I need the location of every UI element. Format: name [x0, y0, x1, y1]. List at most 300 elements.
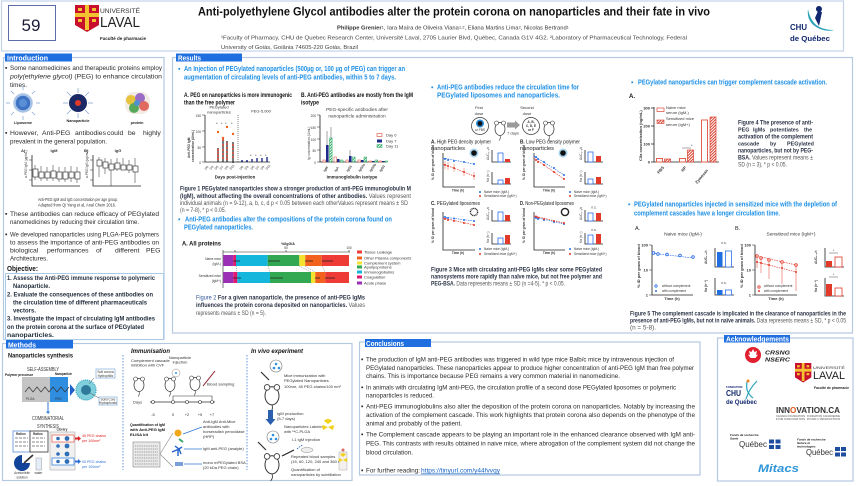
chart: protein corona stacked bars: 50: [284, 246, 288, 250]
text: efficacy reduction: nanomedicines by reducing their circulation time.: [10, 219, 139, 226]
panel: objectives list: on the protein corona at the surface of PEGylated: [7, 324, 144, 331]
diagram: dosing schedule: or F: [528, 128, 534, 132]
chart: figure 1A anti-PEG IgM scatter: D11: [265, 164, 272, 171]
diagram: in vivo experiment: Repeated blood samples: [291, 454, 335, 459]
chart: figure 1B immunoglobulin isotype bars: IgA: [334, 166, 340, 173]
chart: figure 3D non-PEGylated liposomes: n.s.: [591, 206, 597, 210]
heading: conclusions: [365, 339, 431, 348]
chart: protein corona stacked bars: Apolipoproteins: [364, 264, 392, 270]
diagram: in vivo experiment: (15, 60, 120, 240 and 360 min): [291, 459, 346, 464]
logo: FRQ Nature et technologies: Québec: [806, 448, 833, 457]
authors: 1,2: [459, 24, 465, 30]
chart: figure 1A anti-PEG IgM scatter: D3: [244, 165, 250, 171]
chart: figure 5A naive mice: n.s.: [721, 241, 727, 245]
text: anti-PEG prevalence: highly: [143, 130, 161, 137]
text: developed nanoparticles: Architectures.: [10, 256, 48, 262]
chart: figure 1A anti-PEG IgM scatter: *: [250, 153, 252, 158]
chart: figure 3B low PEG density: % ID per gram of blood: [522, 145, 526, 180]
chart: figure 4 C5a concentration bars: serum (IgM-): [666, 110, 690, 115]
logo: Université Laval: UNIVERSITÉ: [813, 365, 846, 370]
chart: protein corona stacked bars: Coagulation: [364, 274, 385, 280]
chart: figure 3B low PEG density: [520, 140, 607, 198]
panel: objectives list: vectors.: [13, 308, 36, 314]
chart: figure 1A anti-PEG IgM scatter: nanoparticles: [207, 110, 231, 114]
chart: figure 3B low PEG density: Naive mice (IgM-): [574, 190, 599, 194]
text: anti-PEG prevalence: ▪: [5, 130, 8, 137]
diagram: ELISA quantification: (HRP): [203, 434, 215, 439]
chart: figure 3B low PEG density: Time (h): [543, 188, 555, 192]
text: complement cascade: [361, 432, 695, 456]
chart: figure 5A naive mice: without complement: [662, 284, 690, 288]
chart: figure 3D non-PEGylated liposomes: Time (h): [543, 251, 555, 255]
diagram: combinatorial synthesis: 05 PEG chains: [82, 460, 106, 464]
finding: complement depletion: [628, 202, 838, 218]
caption: figure 3: Figure 3 Mice with circulating anti-PEG IgMs clear some PEGylated: [431, 266, 602, 274]
chart: figure 5B sensitized mice: [735, 226, 844, 301]
panel: methods: [2, 340, 352, 481]
chart: figure 5B sensitized mice: Kα (h⁻¹): [814, 280, 818, 292]
chart: figure 3C PEGylated liposomes: % ID per gram of blood: [431, 208, 435, 243]
arrow: to combinatorial synthesis: [46, 402, 50, 413]
logo: Fondation CHU de Québec: CHU: [726, 389, 741, 398]
chart: figure 3C PEGylated liposomes: AUC₀₋₆h: [486, 207, 490, 220]
chart: figure 3D non-PEGylated liposomes: Sensitized mice (IgM+): [574, 252, 607, 256]
chart: figure 1A anti-PEG IgM scatter: *: [265, 153, 267, 158]
chart: protein corona stacked bars: Sensitized mice: [199, 274, 221, 278]
chart: figure 4 C5a concentration bars: PBS: [656, 165, 665, 175]
chart: figure 1A anti-PEG IgM scatter: PEGylated: [209, 104, 229, 110]
caption: figure 4: the: [804, 128, 812, 134]
text: IgM production: ▪: [361, 356, 364, 364]
chart: protein corona stacked bars: Complement system: [364, 260, 401, 266]
text: developed nanoparticles: [5, 232, 160, 262]
chart: figure 1A anti-PEG IgM scatter: *: [231, 121, 233, 126]
text: further reading: https://tinyurl.com/y44fvvqy: [421, 468, 501, 474]
caption: figure 1: [180, 186, 411, 214]
chart: figure 3A high PEG density: A. High PEG density polymer: [431, 140, 491, 146]
caption: figure 4: Figure 4 The presence of anti-: [738, 120, 813, 126]
text: developed nanoparticles: performances: [47, 248, 89, 254]
title: Anti-polyethylene Glycol antibodies alter the protein corona on nanoparticles and their fate in vivo: [198, 4, 710, 18]
caption: figure 4: PEGylated: [787, 142, 814, 148]
affiliations: University of Goiás, Goiânia 74605-220 Goiás, Brazil: [221, 45, 358, 51]
logo: Innovation.ca: FOR INNOVATION: [776, 418, 805, 421]
panel: objectives list: 1. Assess the Anti-PEG immune response to polymeric: [7, 275, 155, 282]
diagram: combinatorial synthesis: water: [35, 471, 43, 475]
diagram: dosing schedule: dose: [475, 111, 484, 116]
chart: figure 1A anti-PEG IgM scatter: Anti-PEG IgM: [187, 137, 191, 158]
chart: figure 5A naive mice: with complement: [662, 289, 686, 293]
chart: figure 1A anti-PEG IgM scatter: 50: [197, 146, 201, 150]
text: developed nanoparticles: to assess the importance of anti-PEG antibodies on: [10, 240, 159, 246]
diagram: ELISA quantification: IgM anti-PEG (analyte): [203, 446, 244, 451]
chart: figure 1B immunoglobulin isotype bars: Day 0: [386, 132, 397, 138]
chart: figure 1A anti-PEG IgM scatter: concentration (U/mL): [191, 130, 195, 162]
affiliations: [221, 36, 687, 51]
diagram: self-assembly: PLGA: [26, 397, 35, 401]
diagram: combinatorial synthesis: Acetonitrile: [14, 471, 30, 475]
authors: 2: [519, 24, 522, 30]
diagram: ELISA quantification: Anti-IgM Anti-Mice: [203, 419, 236, 424]
finding: circulation time: [431, 84, 579, 100]
diagram: immunisation timeline: Days: [133, 400, 142, 404]
panel: objectives list: the circulation time of different pharmaceuticals: [13, 300, 147, 306]
diagram: self-assembly: Solid Core: [101, 398, 116, 402]
diagram: ELISA quantification: ELISA kit: [130, 432, 149, 437]
chart: protein corona stacked bars: %/IgG/A: [281, 242, 295, 246]
logo: CRSNG NSERC: [745, 347, 791, 364]
chart: figure 1A anti-PEG IgM scatter: *: [260, 153, 262, 158]
heading: methods: Methods: [8, 340, 36, 350]
text: efficacy reduction: These antibodies can reduce efficacy of PEGylated: [10, 211, 159, 218]
heading: introduction: [5, 54, 72, 62]
finding: protein corona: [178, 216, 392, 232]
diagram: combinatorial synthesis: solution: [16, 476, 28, 480]
caption: figure 5: (n = 5-8).: [630, 324, 656, 332]
panel: acknowledgements: [718, 334, 853, 481]
chart: IgM and IgG box plots: A): [21, 148, 26, 153]
chart: figure 4 C5a concentration bars: 200: [643, 124, 651, 128]
text: complement cascade: PEG. This contrasts with results obtained in naive mice, where abrogation of the complement system did not change the: [366, 440, 695, 448]
text: PEG usage: ▪: [5, 65, 8, 72]
diagram: in vivo experiment: Nanoparticles Labeled: [284, 424, 324, 429]
text: developed nanoparticles: of: [96, 248, 102, 254]
chart: figure 5A naive mice: % ID per gram of blood: [636, 244, 641, 288]
icon: protein: protein: [131, 121, 144, 125]
chart: figure 4 C5a concentration bars: *: [691, 143, 693, 148]
logo: Université Laval: [795, 363, 849, 390]
logo: FRQ Santé: [730, 433, 780, 449]
diagram: combinatorial synthesis: per 100nm²: [82, 465, 101, 469]
text: complement cascade: The Complement cascade appears to be playing an important role in the enhanced clearance observed with IgM anti-: [366, 432, 695, 438]
chart: figure 5A naive mice: 100: [641, 242, 649, 248]
chart: figure 1A anti-PEG IgM scatter: *: [255, 153, 257, 158]
logo: Innovation.ca: FONDATION CANADIENNE: [807, 415, 840, 418]
diagram: combinatorial synthesis: Ratios: [16, 432, 26, 436]
chart: figure 3D non-PEGylated liposomes: AUC₀₋₆h: [579, 207, 583, 220]
caption: figure 2: represents means ± SD (n = 5).: [196, 310, 266, 317]
chart: figure 1A anti-PEG IgM scatter: D5: [214, 165, 220, 171]
chart: protein corona stacked bars: 100: [346, 246, 352, 250]
chart: figure 1B immunoglobulin isotype bars: 150: [311, 126, 316, 130]
chart: IgM and IgG box plots: a-PEG IgM (µg/mL): [24, 150, 28, 178]
diagram: ELISA quantification: antibodies with: [203, 424, 229, 429]
subheading: immunisation: Immunisation: [131, 349, 170, 355]
diagram: self-assembly: SELF-ASSEMBLY: [27, 367, 60, 373]
text: PEG usage: [5, 65, 163, 89]
chart: IgM and IgG box plots: IgM: [51, 148, 58, 153]
chart: figure 3D non-PEGylated liposomes: Kα (h⁻¹): [579, 232, 583, 243]
diagram: in vivo experiment: (5-7 days): [277, 416, 296, 421]
diagram: ELISA quantification: mono mPEGylated BSA: [203, 460, 246, 465]
chart: figure 3B low PEG density: B. Low PEG density polymer: [520, 140, 580, 146]
caption: box plots: Adapted from Qi Yang et al, Anal Chem 2016.: [38, 202, 116, 208]
chart: figure 3D non-PEGylated liposomes: n.s.: [591, 228, 597, 232]
logo: FRQ Santé: Québec: [739, 440, 767, 449]
diagram: in vivo experiment: Quantification of: [291, 467, 321, 472]
finding: protein corona: PEGylated nanoparticles.: [184, 224, 253, 232]
caption: figure 1: individual animals (n = 9-12), a, b, c, d p < 0.05 between each otherValues represent means ± SD: [180, 200, 408, 207]
panel: conclusions: [360, 339, 700, 475]
caption: figure 4: IgMs: [753, 128, 765, 134]
chart: figure 3A high PEG density: % ID per gram of blood: [431, 145, 435, 180]
icon: liposome: Liposome: [14, 121, 32, 125]
caption: figure 5: presence of anti-PEG IgMs, but not in naïve animals. Data represents means ± SD, * p < 0.05: [630, 318, 846, 324]
diagram: combinatorial synthesis: 45 PEG chains: [82, 434, 106, 438]
chart: figure 1B immunoglobulin isotype bars: Day 11: [386, 144, 399, 148]
caption: figure 1: (n = 7-8), * p < 0.05.: [180, 207, 226, 214]
logo: FRQ Nature et technologies: technologies: [797, 444, 816, 448]
chart: protein corona stacked bars: Acute phase: [364, 280, 387, 286]
panel: header: [2, 1, 844, 51]
chart: figure 3B low PEG density: Kα (h⁻¹): [579, 170, 583, 182]
diagram: immunisation timeline: +5: [198, 412, 203, 417]
text: protein corona deposition: animal and probably of the patient.: [366, 420, 462, 428]
text: efficacy reduction: ▪: [5, 211, 8, 218]
chart: figure 3D non-PEGylated liposomes: Naive mice (IgM-): [574, 247, 599, 251]
diagram: immunisation timeline: +2: [185, 412, 190, 417]
diagram: immunisation timeline: [131, 355, 234, 417]
finding: protein corona: Anti-PEG antibodies alter the compositions of the protein corona found on: [185, 216, 392, 224]
chart: figure 5A naive mice: n.s.: [721, 281, 727, 285]
chart: figure 1B immunoglobulin isotype bars: 50: [312, 149, 316, 153]
chart: figure 5A naive mice: Naive mice (IgM-): [664, 232, 702, 238]
chart: figure 3C PEGylated liposomes: C. PEGylated liposomes: [431, 201, 480, 207]
heading: methods: [6, 340, 73, 350]
caption: figure 4: BSA. Values represent means ±: [738, 154, 814, 162]
chart: protein corona stacked bars: Naive mice: [205, 257, 221, 261]
chart: figure 5A naive mice: [635, 226, 734, 301]
text: further reading: [361, 468, 501, 474]
heading: introduction: Introduction: [7, 54, 48, 62]
diagram: dosing schedule: First: [475, 105, 484, 110]
chart: figure 1A anti-PEG IgM scatter: PEG-5,000: [251, 108, 272, 114]
text: IgM production: [361, 356, 695, 380]
text: developed nanoparticles: PEG: [146, 248, 160, 254]
chart: figure 1B immunoglobulin isotype bars: IgG2b: [369, 163, 377, 173]
logo: FRQ Nature et technologies: Fonds de recherche: [797, 438, 826, 442]
chart heading: figure 1A: A. PEG on nanoparticles is more immunogenic: [184, 93, 293, 99]
logo: Université Laval: [75, 5, 147, 41]
chart: figure 1B immunoglobulin isotype bars: IgG3: [379, 164, 386, 173]
diagram: dosing schedule: A, B,: [527, 120, 535, 124]
diagram: immunisation timeline: Nanoparticle: [169, 355, 192, 360]
diagram: combinatorial synthesis: [13, 416, 106, 480]
logo: Innovation.ca: POUR L'INNOVATION: [807, 418, 840, 421]
diagram: self-assembly: [5, 367, 117, 405]
poster number box: 59: [22, 16, 40, 35]
diagram: dosing schedule: or PBS: [475, 128, 485, 132]
chart: figure 3A high PEG density: Time (h): [452, 188, 464, 192]
chart: figure 5B sensitized mice: with complement: [764, 289, 788, 293]
chart: figure 5A naive mice: 1: [646, 292, 649, 298]
chart: figure 5A naive mice: AUC₀₋₆h: [704, 251, 708, 264]
text: efficacy reduction: [5, 211, 159, 226]
chart: figure 3D non-PEGylated liposomes: [520, 201, 607, 256]
icon: nanoparticle: Nanoparticle: [66, 119, 90, 123]
chart: figure 3B low PEG density: AUC₀₋₆h: [579, 147, 583, 160]
heading: conclusions: Conclusions: [366, 339, 404, 348]
chart: figure 5B sensitized mice: Time (h): [768, 296, 784, 301]
panel: objectives list: [6, 274, 164, 340]
chart: figure 1A anti-PEG IgM scatter: 0: [199, 161, 201, 165]
text: circulation profile: In animals with circulating IgM anti-PEG, the circulation profile of a second dose PEGylated liposomes or polymeric: [366, 384, 677, 392]
diagram: immunisation timeline: Blood sampling: [207, 382, 234, 386]
text: circulation profile: [361, 384, 677, 400]
panel: objectives list: 2. Evaluate the consequences of these antibodies on: [7, 292, 153, 298]
diagram: self-assembly: Nanoparticle: [55, 372, 72, 376]
diagram: in vivo experiment: Mice immunization with: [284, 373, 325, 378]
chart heading: figure 1B: B. Anti-PEG antibodies are mostly from the IgM: [301, 93, 413, 99]
diagram: immunisation timeline: 0: [172, 412, 175, 417]
chart: figure 5B sensitized mice: without complement: [764, 284, 792, 288]
authors: , Eliana Martins Lima: [465, 26, 519, 32]
diagram: immunisation timeline: injection: [173, 360, 187, 364]
logo: Fondation CHU de Québec: FONDATION: [726, 385, 742, 389]
text: protein corona deposition: [361, 404, 695, 428]
text: anti-PEG prevalence: However,: [10, 130, 38, 137]
logo: CRSNG NSERC: NSERC: [765, 358, 791, 364]
chart: figure 1B immunoglobulin isotype bars: 0: [314, 161, 316, 165]
caption: figure 1: (IgM), without affecting the overall concentrations of other antibodies. Values represent: [180, 193, 411, 200]
diagram: dosing schedule: 7 days: [507, 130, 519, 136]
finding: circulation time: Anti-PEG antibodies reduce the circulation time for: [437, 84, 579, 92]
chart: figure 5B sensitized mice: % ID per gram of blood: [739, 244, 744, 288]
caption: figure 3: nanosystems more rapidly than naïve mice, but not free polymer and: [431, 274, 602, 280]
logo: Fondation CHU de Québec: de Québec: [726, 399, 757, 406]
chart: IgM and IgG box plots: B): [84, 148, 89, 153]
chart: figure 1B immunoglobulin isotype bars: IgM: [323, 166, 329, 173]
chart: protein corona stacked bars: Other Plasma components: [364, 256, 411, 260]
logo: Mitacs: Mitacs: [758, 463, 799, 475]
diagram: ELISA quantification: Quantification of IgM: [130, 422, 166, 427]
authors: 1: [382, 24, 385, 30]
panel: objectives list: Nanoparticle.: [13, 283, 50, 290]
text: protein corona deposition: ▪: [361, 404, 364, 410]
caption: figure 4: activation of the complement: [738, 134, 813, 140]
subheading: in vivo experiment: In vivo experiment: [251, 349, 304, 355]
chart: figure 1A anti-PEG IgM scatter: D3: [209, 165, 215, 171]
chart: figure 5B sensitized mice: B.: [735, 226, 741, 232]
logo: Innovation.ca: CANADA FOUNDATION: [776, 415, 805, 418]
chart: protein corona stacked bars: Tissue Leakage: [364, 250, 393, 254]
diagram: in vivo experiment: IgM production: [277, 411, 303, 416]
diagram: combinatorial synthesis: per 100nm²: [82, 439, 101, 443]
chart: figure 4 C5a concentration bars: 0: [648, 160, 651, 164]
chart: figure 3C PEGylated liposomes: Kα (h⁻¹): [486, 232, 490, 243]
text: developed nanoparticles: ▪: [5, 232, 8, 238]
diagram: self-assembly: PEG: [55, 397, 62, 401]
chart: figure 3C PEGylated liposomes: Sensitized mice (IgM+): [484, 252, 517, 256]
chart: figure 3B low PEG density: Sensitized mice (IgM+): [574, 194, 607, 198]
subheading: nanoparticles synthesis: Nanoparticles synthesis: [8, 352, 73, 360]
finding: injection augments antibodies: An Injection of PEGylated nanoparticles (500µg or, 100 µg of PEG) can trigger an: [184, 66, 405, 73]
chart: figure 3A high PEG density: [431, 140, 517, 198]
finding: circulation time: ▪: [431, 84, 434, 92]
heading: results: Results: [178, 54, 201, 62]
chart: figure 1A anti-PEG IgM scatter: D7: [255, 165, 261, 171]
chart: figure 3D non-PEGylated liposomes: D. Non-PEGylated liposomes: [520, 201, 574, 207]
finding: complement activation: ▪: [631, 80, 634, 86]
finding: injection augments antibodies: ▪: [178, 66, 181, 73]
text: IgM production: PEGylated nanoparticles. These nanoparticles appear to produce higher concentration of anti-PEG IgM than free polymer: [366, 365, 695, 372]
chart: figure 3D non-PEGylated liposomes: % ID per gram of blood: [522, 208, 526, 243]
chart: figure 4 C5a concentration bars: 100: [643, 142, 651, 146]
diagram: ELISA quantification: with Anti-PEG IgM: [129, 427, 166, 432]
diagram: immunisation timeline: -5: [151, 412, 156, 417]
chart: figure 3C PEGylated liposomes: [431, 201, 517, 256]
text: anti-PEG prevalence: Anti-PEG: [42, 130, 70, 137]
diagram: in vivo experiment: 100nm, 45 PEG chains/100 nm²: [284, 384, 342, 389]
caption: box plots: [38, 197, 118, 208]
text: developed nanoparticles: different: [115, 248, 140, 254]
chart: figure 1B immunoglobulin isotype bars: PEG-specific antibodies after: [326, 107, 388, 113]
diagram: self-assembly: Polymer precursor: [5, 372, 33, 377]
logo: FRQ Nature et technologies: [797, 438, 846, 457]
chart: figure 1B immunoglobulin isotype bars: Immunoglobulin isotype: [327, 174, 378, 180]
chart heading: figure 1A: [184, 93, 293, 106]
caption: figure 2: [196, 294, 365, 317]
text: anti-PEG prevalence: [5, 130, 161, 146]
chart heading: all proteins: A. All proteins: [182, 240, 221, 248]
chart: figure 4 C5a concentration bars: C5a concentration (ng/mL): [638, 110, 643, 161]
chart: figure 4 C5a concentration bars: 300: [643, 106, 651, 110]
diagram: in vivo experiment: with ¹⁴C-PLGA: [284, 429, 310, 434]
text: circulation profile: nanoparticles is reduced.: [366, 392, 434, 400]
caption: box plots: Anti-PEG IgM and IgG concentration per age group.: [38, 197, 118, 202]
diagram: dosing schedule: [472, 105, 554, 140]
poster number box: [8, 6, 56, 40]
chart: protein corona stacked bars: [199, 242, 411, 288]
chart: figure 1A anti-PEG IgM scatter: D0: [239, 165, 245, 171]
chart: protein corona stacked bars: (IgM-): [212, 262, 221, 266]
logo: CHU de Québec: CHU: [790, 22, 807, 32]
logo: Innovation.ca: INNOVATION.CA: [776, 405, 840, 415]
icon: liposome: [6, 86, 40, 125]
chart: figure 5B sensitized mice: 10: [747, 268, 752, 272]
chart: figure 3A high PEG density: AUC₀₋₆h: [486, 147, 490, 160]
diagram: immunisation timeline: +7: [210, 412, 215, 417]
chart: figure 1A anti-PEG IgM scatter: D9: [224, 165, 230, 171]
diagram: in vivo experiment: [258, 360, 347, 481]
diagram: self-assembly: Soft corona: [97, 370, 114, 374]
diagram: ELISA quantification: [129, 419, 246, 470]
chart: figure 3A high PEG density: Kα (h⁻¹): [486, 170, 490, 182]
chart: figure 1A anti-PEG IgM scatter: D5: [250, 165, 256, 171]
caption: figure 3: [431, 266, 602, 288]
logo: Innovation.ca: [776, 405, 840, 421]
logo: Université Laval: LAVAL: [100, 14, 140, 31]
diagram: immunisation timeline: inhibition with CVF: [131, 362, 165, 368]
diagram: in vivo experiment: nanoparticles by scintillation: [291, 472, 341, 477]
logo: FRQ Santé: Santé: [730, 436, 739, 440]
chart: figure 1A anti-PEG IgM scatter: *: [221, 121, 223, 126]
diagram: combinatorial synthesis: COMBINATORIAL: [32, 416, 64, 422]
finding: protein corona: ▪: [178, 216, 181, 224]
chart: figure 3A high PEG density: Naive mice (IgM-): [484, 190, 509, 194]
caption: figure 4: [738, 120, 814, 168]
text: PEG usage: times.: [10, 82, 27, 89]
finding: complement depletion: ▪: [628, 202, 631, 208]
diagram: in vivo experiment: PEGylated Nanoparticles: [284, 378, 329, 383]
chart: figure 4 C5a concentration bars: Sensitized mice: [666, 116, 695, 121]
diagram: dosing schedule: dose: [523, 111, 532, 116]
text: anti-PEG prevalence: be: [128, 130, 136, 137]
chart: figure 3A high PEG density: nanoparticles: [431, 146, 466, 152]
text: further reading: ▪: [361, 468, 364, 474]
chart: figure 4 C5a concentration bars: NP: [680, 165, 688, 173]
chart: figure 1B immunoglobulin isotype bars: 200: [311, 114, 316, 118]
